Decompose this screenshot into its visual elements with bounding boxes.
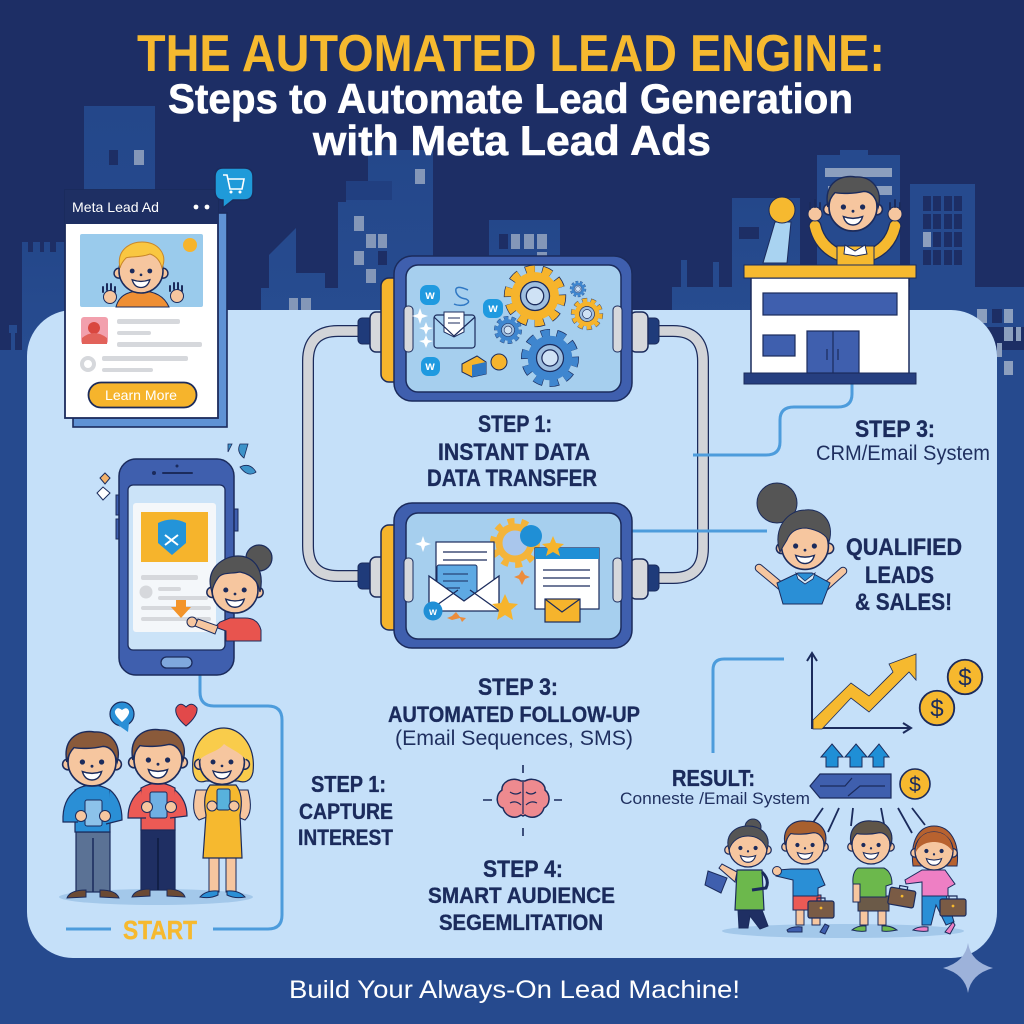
blue heart bubble — [110, 702, 134, 732]
small gold star — [492, 594, 518, 620]
small window — [763, 335, 795, 356]
side tabs — [404, 306, 622, 352]
red heart — [176, 704, 197, 726]
left plug — [358, 278, 401, 382]
hair bun — [757, 483, 797, 523]
title line 1: THE AUTOMATED LEAD ENGINE: — [137, 25, 885, 83]
app badges: w — [424, 288, 435, 302]
step 1 capture interest text — [298, 771, 393, 850]
avatar ring — [82, 358, 94, 370]
blue hex — [158, 520, 186, 555]
coins — [948, 660, 982, 694]
ground shadow — [59, 889, 253, 905]
step 4 text: SMART AUDIENCE — [428, 883, 615, 908]
woman with bun — [187, 545, 272, 641]
app badges — [420, 285, 503, 376]
right plug — [630, 312, 659, 352]
Learn More button — [88, 382, 196, 408]
device screen — [406, 513, 621, 639]
gears — [496, 270, 600, 382]
phone body — [119, 459, 234, 675]
app badges: w — [424, 359, 435, 373]
step 3 crm text: STEP 3: — [855, 416, 935, 443]
step 4 text: SEGEMLITATION — [439, 910, 603, 935]
yellow envelope — [545, 599, 580, 622]
small coin face — [491, 354, 507, 370]
hair — [778, 510, 830, 552]
step 3 automated follow-up text: (Email Sequences, SMS) — [395, 727, 633, 750]
customer 4 — [888, 826, 966, 934]
title line 2: Steps to Automate Lead Generation — [168, 75, 853, 122]
side tabs — [404, 558, 622, 602]
growth chart — [807, 653, 982, 733]
step 3 crm text: CRM/Email System — [816, 442, 990, 465]
step 1 capture interest text: INTEREST — [298, 825, 393, 850]
qualified leads text: LEADS — [865, 562, 934, 589]
polo shirt — [777, 573, 830, 604]
step 1 instant data text — [427, 411, 597, 492]
man in blue — [63, 732, 122, 898]
head — [776, 523, 834, 569]
ground shadow — [722, 924, 964, 938]
home button — [161, 657, 192, 668]
package box — [462, 356, 486, 377]
customer 3 — [848, 821, 897, 931]
flow lines — [66, 384, 852, 929]
gold star — [542, 536, 564, 556]
store building with man — [744, 177, 916, 384]
step 3 crm text — [816, 416, 990, 465]
letter page — [436, 542, 494, 592]
blue dot — [424, 602, 442, 620]
door — [807, 331, 859, 373]
step 1 instant data text: STEP 1: — [478, 411, 552, 438]
pink thumbnail — [81, 317, 108, 344]
store wall — [751, 278, 909, 374]
up arrows — [821, 744, 889, 767]
step 1 instant data text: INSTANT DATA — [438, 439, 590, 466]
orange star — [514, 570, 530, 585]
icon: brain — [483, 765, 562, 836]
woman in blue polo — [757, 483, 843, 604]
customer 1 — [705, 819, 771, 929]
device frame — [394, 256, 632, 401]
card image — [80, 234, 203, 307]
step 1 capture interest text: STEP 1: — [311, 771, 386, 797]
man in red — [128, 730, 187, 897]
audience group — [59, 702, 253, 905]
device 1: instant data transfer — [358, 256, 659, 401]
sparkles — [412, 308, 433, 348]
customers group — [705, 819, 966, 938]
envelope icon — [434, 312, 475, 348]
Learn More button: Learn More — [105, 387, 177, 403]
left plug — [358, 525, 401, 630]
collar — [796, 573, 815, 584]
blue dot: w — [428, 607, 437, 618]
customer 2 — [772, 821, 834, 934]
download arrow — [171, 600, 191, 618]
screen lines — [140, 575, 211, 621]
step 3 automated follow-up text: STEP 3: — [478, 674, 558, 701]
result text — [620, 765, 810, 808]
blue note — [437, 565, 477, 601]
woman in yellow — [193, 728, 253, 898]
result text: RESULT: — [672, 765, 755, 791]
phone speaker — [152, 464, 193, 475]
phone screen — [128, 485, 225, 650]
orange gear — [493, 521, 537, 565]
gold banner — [141, 512, 208, 562]
step 3 automated follow-up text — [388, 674, 640, 750]
card: Meta Lead Ad — [65, 168, 253, 427]
connector tubes between devices — [308, 331, 703, 578]
step 1 instant data text: DATA TRANSFER — [427, 465, 597, 492]
card header — [65, 190, 218, 224]
placeholder lines — [102, 319, 202, 372]
store roof — [744, 265, 916, 278]
main content panel — [27, 310, 997, 958]
step 4 text — [428, 856, 615, 935]
sparkle diamonds — [97, 473, 110, 500]
header dots — [194, 205, 209, 209]
funnel bar — [810, 774, 891, 798]
device screen — [406, 265, 621, 392]
sparkle — [415, 536, 431, 552]
lamp — [763, 197, 795, 263]
dollar coin — [900, 769, 930, 799]
rising arrow — [813, 654, 916, 729]
device 2: automated follow-up — [358, 503, 659, 648]
happy man — [808, 177, 902, 266]
blue badge — [520, 525, 542, 547]
right plug — [630, 559, 659, 599]
card shadow — [73, 213, 227, 427]
decorative star — [943, 943, 993, 993]
boy illustration — [103, 242, 184, 307]
step 3 automated follow-up text: AUTOMATED FOLLOW-UP — [388, 702, 640, 727]
browser window — [535, 548, 599, 609]
qualified leads text: QUALIFIED — [846, 534, 962, 561]
step 4 text: STEP 4: — [483, 856, 563, 883]
START label: START — [123, 915, 197, 945]
orange splat — [447, 612, 466, 622]
app badges: w — [487, 301, 498, 315]
screen card — [133, 503, 216, 632]
qualified leads text: & SALES! — [855, 589, 952, 616]
symbol S — [454, 287, 469, 305]
result text: Conneste /Email System — [620, 789, 810, 808]
badge — [183, 238, 197, 252]
device frame — [394, 503, 632, 648]
open envelope — [429, 576, 499, 611]
step 1 capture interest text: CAPTURE — [299, 799, 393, 824]
water drops — [228, 444, 256, 474]
card body — [65, 190, 218, 418]
card header text: Meta Lead Ad — [72, 199, 159, 215]
arms — [759, 568, 843, 588]
title — [137, 25, 885, 164]
phone illustration — [97, 444, 272, 675]
store base — [744, 373, 916, 384]
icon: shopping cart bubble — [215, 168, 253, 208]
coin — [920, 691, 954, 725]
phone side buttons — [116, 495, 238, 539]
footer text: Build Your Always-On Lead Machine! — [289, 976, 740, 1004]
rays — [812, 808, 925, 833]
upper window — [763, 293, 897, 315]
axes — [807, 653, 911, 733]
qualified leads text — [846, 534, 962, 616]
title line 3: with Meta Lead Ads — [312, 117, 711, 164]
